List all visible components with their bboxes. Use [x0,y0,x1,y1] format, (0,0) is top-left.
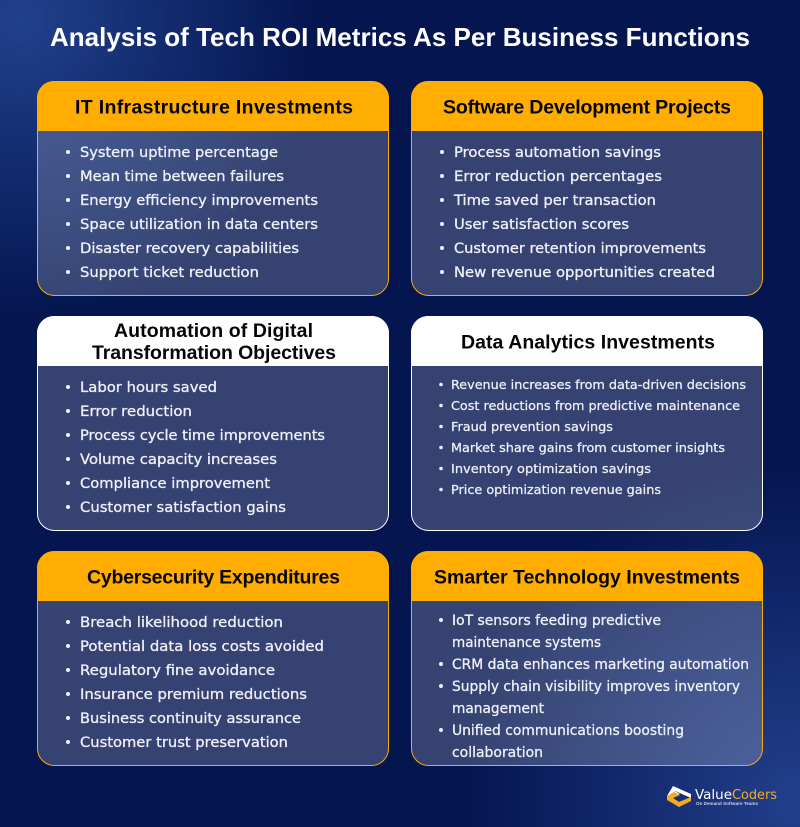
list: Data Analytics metrics [439,378,746,497]
header: Smarter Technology [411,551,763,601]
heading: IT Infrastructure: IT Infrastructure Investments [75,96,353,118]
list: IT Infrastructure metrics: Energy efficiency improvements [80,193,318,209]
list: Data Analytics metrics: Market share gains from customer insights [451,441,725,455]
heading: Automation: Transformation Objectives [92,342,336,364]
icon: ValueCoders mark [667,786,691,807]
list: Automation metrics: Customer satisfaction gains [80,500,286,516]
list: Software Development metrics: Customer retention improvements [454,241,706,257]
heading: Cybersecurity: Cybersecurity Expenditures [87,566,340,588]
list: Software Development metrics: Error reduction percentages [454,169,662,185]
list: Cybersecurity metrics: Insurance premium reductions [80,687,307,703]
list: Software Development metrics: Process automation savings [454,145,661,161]
tagline: On Demand Software Teams [696,801,758,806]
panel: Software Development Projects [411,81,763,296]
list: Automation metrics: Compliance improvement [80,476,271,492]
list: IT Infrastructure metrics: System uptime percentage [80,145,278,161]
panel: Cybersecurity Expenditures [37,551,389,766]
panel: Smarter Technology Investments [411,551,763,766]
list: IT Infrastructure metrics: Space utilization in data centers [80,217,318,233]
header: Automation [37,316,389,366]
list: Software Development metrics [440,145,715,281]
list: Smarter Technology metrics: Unified communications boosting [452,723,684,739]
list: Smarter Technology metrics: Supply chain visibility improves inventory [452,679,740,695]
wordmark: Value [695,788,732,803]
list: Automation metrics: Error reduction [80,404,192,420]
list: Data Analytics metrics: Revenue increases from data-driven decisions [451,378,746,392]
list: Cybersecurity metrics: Business continuity assurance [80,711,301,727]
list: Smarter Technology metrics: maintenance systems [452,635,601,651]
list: Smarter Technology metrics: collaboration [452,745,543,761]
list: Automation metrics: Process cycle time improvements [80,428,325,444]
list: Automation metrics [66,380,325,516]
list: IT Infrastructure metrics: Support ticket reduction [80,265,259,281]
list: Data Analytics metrics: Inventory optimization savings [451,462,651,476]
list: Cybersecurity metrics: Breach likelihood reduction [80,615,283,631]
heading: Automation: Automation of Digital [114,320,313,342]
title: Analysis of Tech ROI Metrics As Per Business Functions [50,22,750,52]
panel: Data Analytics Investments [411,316,763,530]
list: Smarter Technology metrics: management [452,701,544,717]
list: IT Infrastructure metrics: Disaster recovery capabilities [80,241,299,257]
heading: Data Analytics: Data Analytics Investments [461,332,715,354]
list: Software Development metrics: New revenue opportunities created [454,265,715,281]
heading: Software Development: Software Development Projects [443,96,731,118]
wordmark [695,788,777,803]
list: Automation metrics: Volume capacity increases [80,452,277,468]
header: Cybersecurity [37,551,389,601]
panel: Automation of Digital Transformation Objectives [37,316,389,530]
header: IT Infrastructure [37,81,389,131]
list: IT Infrastructure metrics [66,145,318,281]
list: Smarter Technology metrics [439,613,749,761]
list: Data Analytics metrics: Cost reductions from predictive maintenance [451,399,740,413]
heading: Smarter Technology: Smarter Technology Investments [434,566,740,588]
header: Data Analytics [411,316,763,366]
header: Software Development [411,81,763,131]
wordmark: Coders [732,788,777,803]
list: Cybersecurity metrics [66,615,324,751]
heading: Automation [92,320,336,364]
logo: ValueCoders [667,786,777,807]
list: Smarter Technology metrics: CRM data enhances marketing automation [452,657,749,673]
list: Smarter Technology metrics: IoT sensors feeding predictive [452,613,661,629]
list: Cybersecurity metrics: Regulatory fine avoidance [80,663,275,679]
list: Data Analytics metrics: Fraud prevention savings [451,420,613,434]
list: Software Development metrics: User satisfaction scores [454,217,629,233]
list: Cybersecurity metrics: Customer trust preservation [80,735,288,751]
list: Cybersecurity metrics: Potential data loss costs avoided [80,639,324,655]
list: Data Analytics metrics: Price optimization revenue gains [451,483,661,497]
panel: IT Infrastructure Investments [37,81,389,296]
list: IT Infrastructure metrics: Mean time between failures [80,169,284,185]
list: Software Development metrics: Time saved per transaction [453,193,656,209]
list: Automation metrics: Labor hours saved [80,380,217,396]
